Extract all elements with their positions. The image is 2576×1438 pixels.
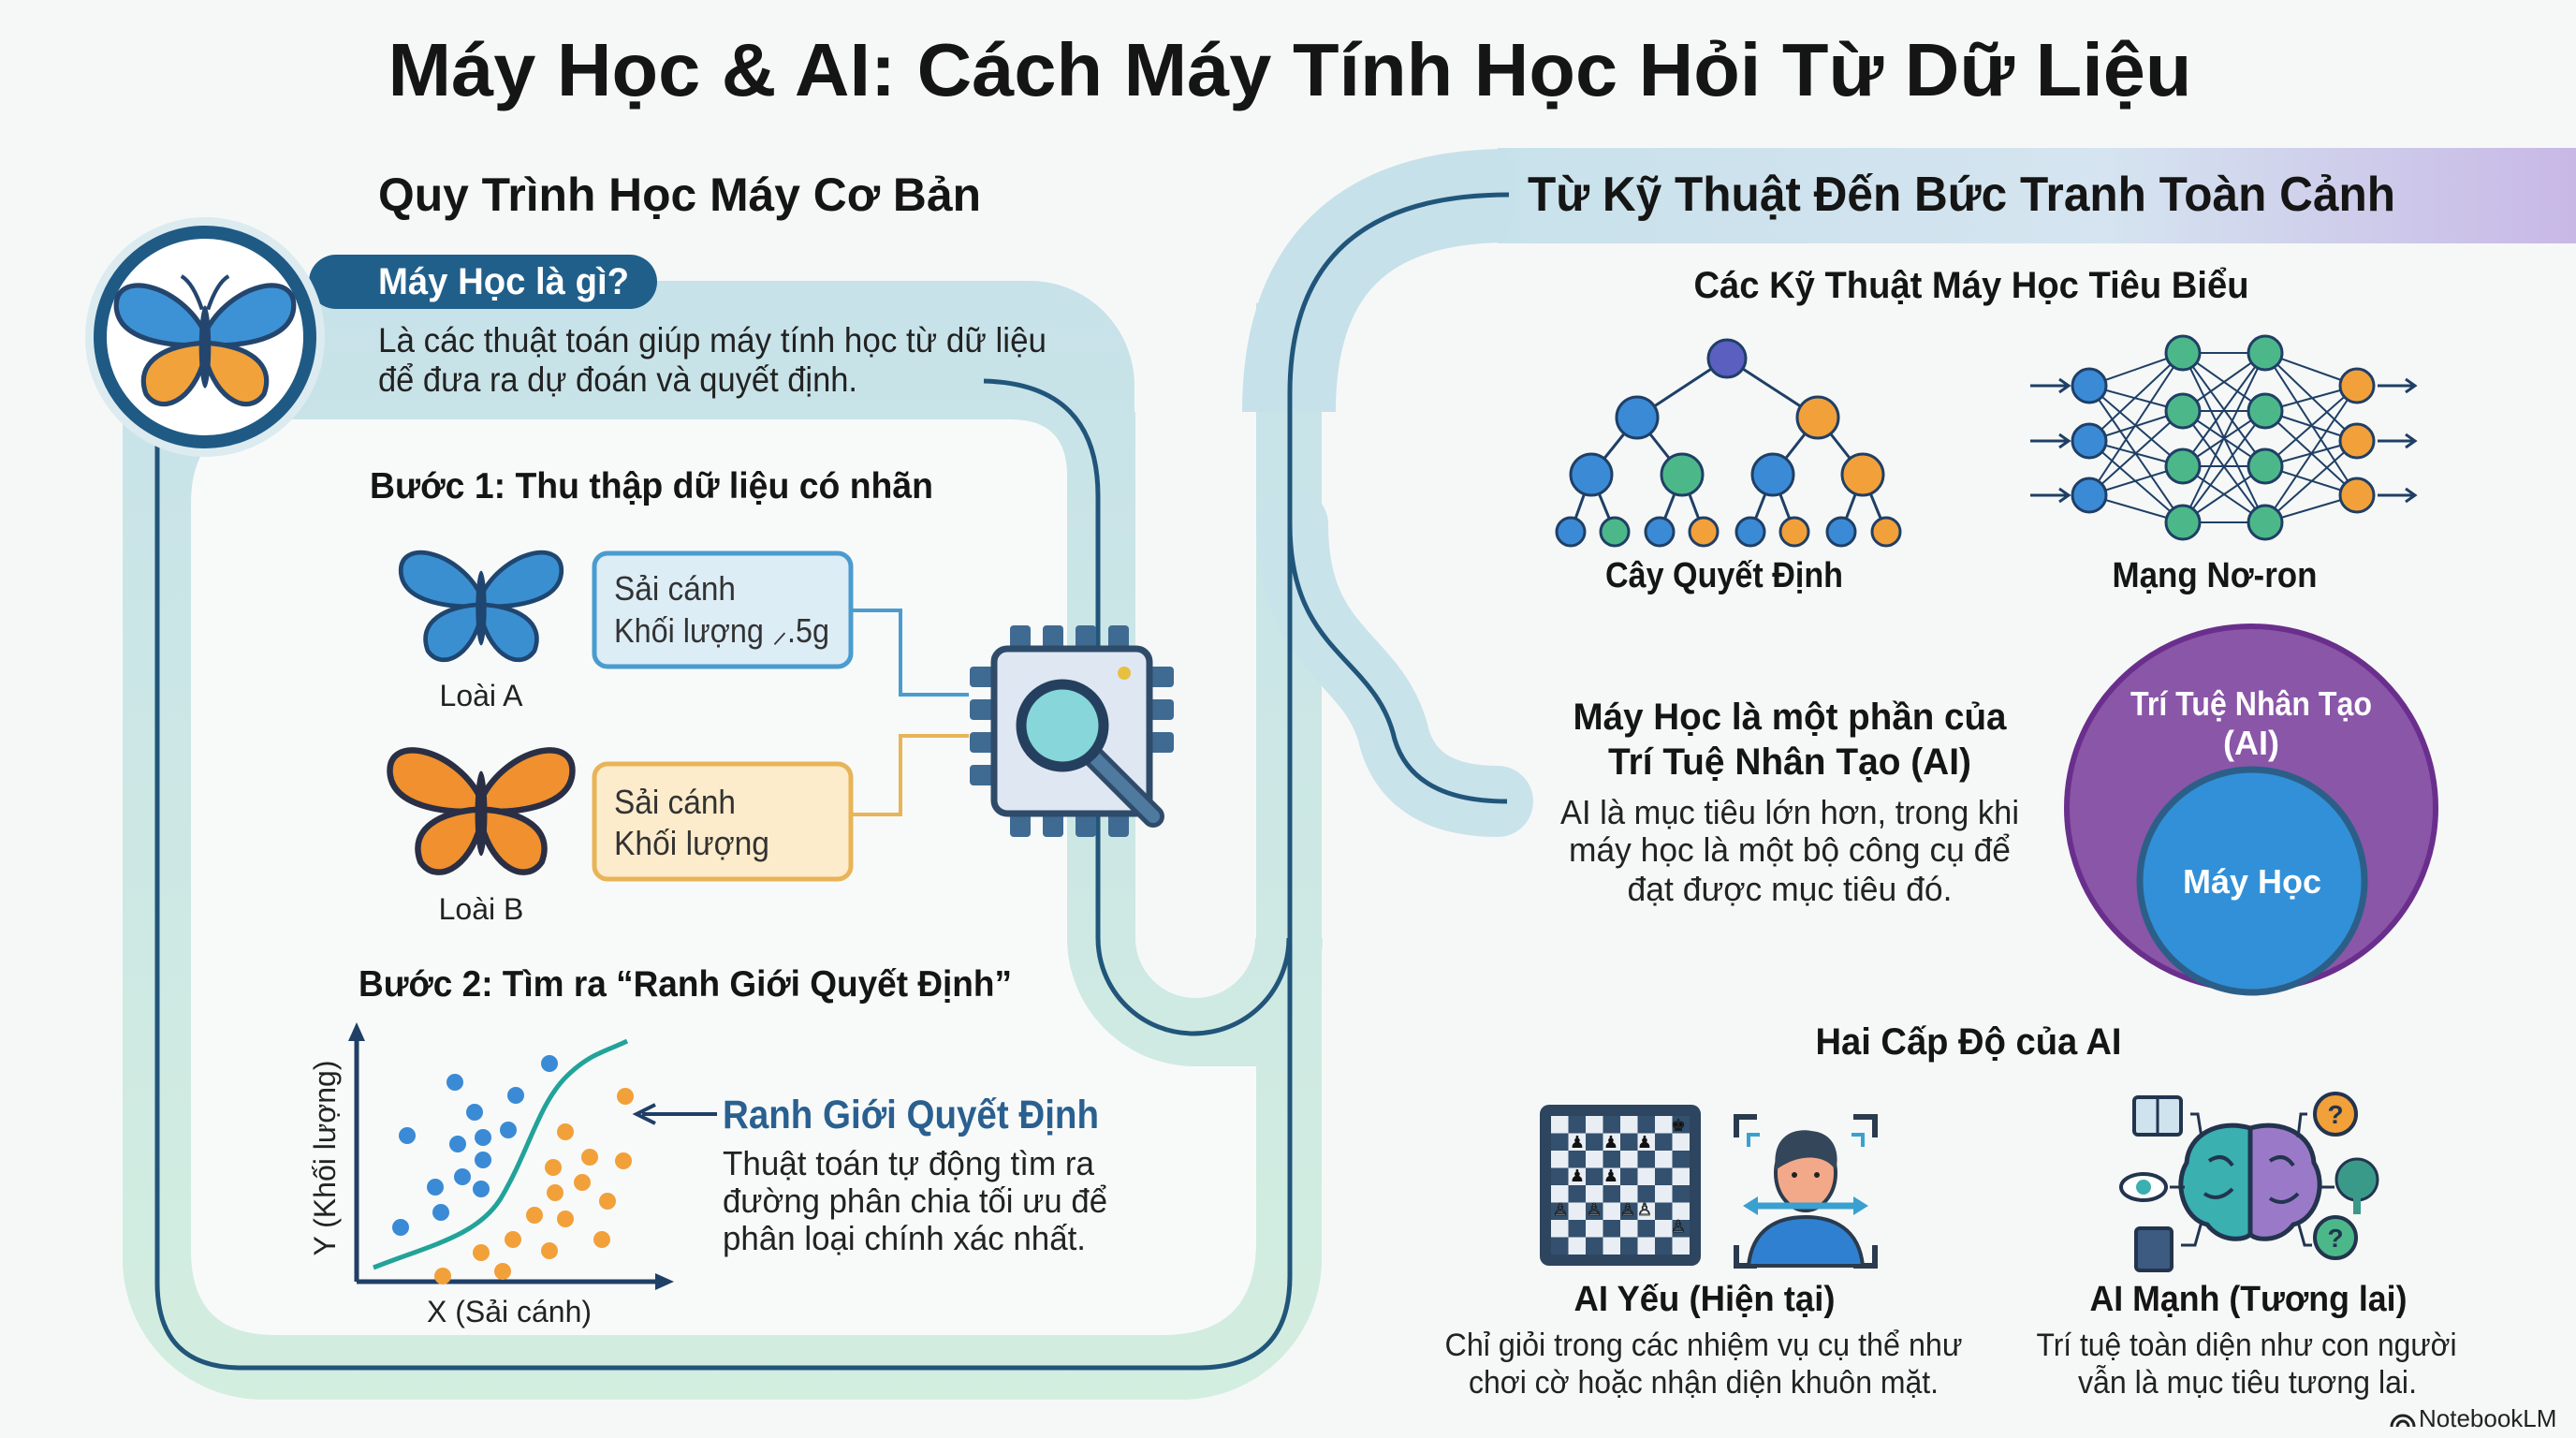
data box A xyxy=(594,553,851,667)
text block: ML part of AI xyxy=(1560,697,2019,908)
data box B: Khối lượng xyxy=(614,824,769,862)
text block: ML part of AI: máy học là một bộ công cụ để xyxy=(1569,830,2011,869)
text block: strong AI: AI Mạnh (Tương lai) xyxy=(2089,1280,2408,1319)
text block: weak AI: chơi cờ hoặc nhận diện khuôn mặt. xyxy=(1469,1365,1939,1401)
subheading: two levels: Hai Cấp Độ của AI xyxy=(1816,1021,2121,1063)
text block: weak AI xyxy=(1445,1280,1962,1401)
text block: weak AI: Chỉ giỏi trong các nhiệm vụ cụ thể như xyxy=(1445,1328,1962,1363)
text block: ML part of AI: AI là mục tiêu lớn hơn, trong khi xyxy=(1560,793,2019,831)
icon: chess board: ♙ xyxy=(1553,1200,1568,1219)
chart: venn AI / ML xyxy=(2067,626,2436,992)
logo: NotebookLM: NotebookLM xyxy=(2419,1404,2556,1432)
data box A: Khối lượng ⸝.5g xyxy=(614,611,829,650)
data box B: Sải cánh xyxy=(614,783,736,821)
icon: chess board: ♟ xyxy=(1603,1167,1618,1185)
icon: chess board xyxy=(1540,1105,1701,1266)
callout: decision boundary: phân loại chính xác nhất. xyxy=(723,1219,1086,1257)
label: Loài A: Loài A xyxy=(440,679,523,712)
step 1 heading: Bước 1: Thu thập dữ liệu có nhãn xyxy=(370,466,933,506)
icon: brain cluster: ? xyxy=(2327,1224,2344,1253)
icon: butterfly A xyxy=(401,552,562,660)
data box B xyxy=(594,764,851,879)
text block: strong AI xyxy=(2037,1280,2456,1401)
callout: decision boundary xyxy=(723,1093,1107,1257)
chart: decision tree xyxy=(1557,340,1900,546)
text block: ML part of AI: đạt được mục tiêu đó. xyxy=(1627,870,1953,908)
label: Loài B: Loài B xyxy=(439,892,523,926)
chart: neural network xyxy=(2030,336,2415,539)
icon: butterfly B xyxy=(390,750,572,873)
icon: chip with magnifier xyxy=(970,625,1174,837)
label: neural network: Mạng Nơ-ron xyxy=(2112,556,2318,595)
panel: what is ML: để đưa ra dự đoán và quyết định. xyxy=(378,360,857,399)
icon: chess board: ♙ xyxy=(1587,1200,1602,1219)
data box A: Sải cánh xyxy=(614,569,736,608)
arrow: boundary pointer xyxy=(637,1105,717,1123)
callout: decision boundary: đường phân chia tối ưu để xyxy=(723,1181,1107,1220)
text block: ML part of AI: Trí Tuệ Nhân Tạo (AI) xyxy=(1608,741,1971,783)
callout: decision boundary: Thuật toán tự động tìm ra xyxy=(723,1144,1095,1182)
scatter chart xyxy=(308,1022,674,1328)
icon: chess board: ♟ xyxy=(1637,1133,1652,1152)
chart: venn AI / ML: Máy Học xyxy=(2183,862,2321,901)
text block: ML part of AI: Máy Học là một phần của xyxy=(1573,697,2007,738)
heading: right section: Từ Kỹ Thuật Đến Bức Tranh Toàn Cảnh xyxy=(1528,168,2395,222)
text block: strong AI: Trí tuệ toàn diện như con người xyxy=(2037,1328,2456,1363)
icon: chess board: ♙ xyxy=(1671,1217,1686,1236)
icon: chess board: ♟ xyxy=(1570,1167,1585,1185)
icon: chess board: ♟ xyxy=(1570,1133,1585,1152)
icon: chess board: ♙ xyxy=(1637,1200,1652,1219)
scatter chart: Y (Khối lượng) xyxy=(308,1060,342,1256)
step 2 heading: Bước 2: Tìm ra “Ranh Giới Quyết Định” xyxy=(359,964,1012,1005)
icon: brain cluster xyxy=(2121,1093,2378,1270)
callout: decision boundary: Ranh Giới Quyết Định xyxy=(723,1093,1099,1137)
icon: chess board: ♙ xyxy=(1620,1200,1635,1219)
icon: face recognition xyxy=(1736,1117,1875,1266)
label: decision tree: Cây Quyết Định xyxy=(1605,556,1843,595)
text block: weak AI: AI Yếu (Hiện tại) xyxy=(1574,1280,1835,1319)
text block: strong AI: vẫn là mục tiêu tương lai. xyxy=(2078,1365,2417,1401)
chart: venn AI / ML: (AI) xyxy=(2223,724,2279,762)
subheading: techniques: Các Kỹ Thuật Máy Học Tiêu Biểu xyxy=(1694,265,2248,306)
panel: what is ML: Là các thuật toán giúp máy tính học từ dữ liệu xyxy=(378,321,1046,360)
panel: what is ML xyxy=(85,217,1046,457)
scatter chart: X (Sải cánh) xyxy=(427,1295,592,1328)
heading: left section: Quy Trình Học Máy Cơ Bản xyxy=(378,169,981,221)
connectors xyxy=(851,610,969,814)
chart: venn AI / ML: Trí Tuệ Nhân Tạo xyxy=(2130,684,2372,723)
icon: chess board: ♚ xyxy=(1671,1116,1686,1135)
icon: chess board: ♟ xyxy=(1603,1133,1618,1152)
icon: brain cluster: ? xyxy=(2327,1100,2344,1129)
title: Máy Học & AI: Cách Máy Tính Học Hỏi Từ Dữ Liệu xyxy=(388,28,2192,111)
panel: what is ML: Máy Học là gì? xyxy=(378,261,629,302)
